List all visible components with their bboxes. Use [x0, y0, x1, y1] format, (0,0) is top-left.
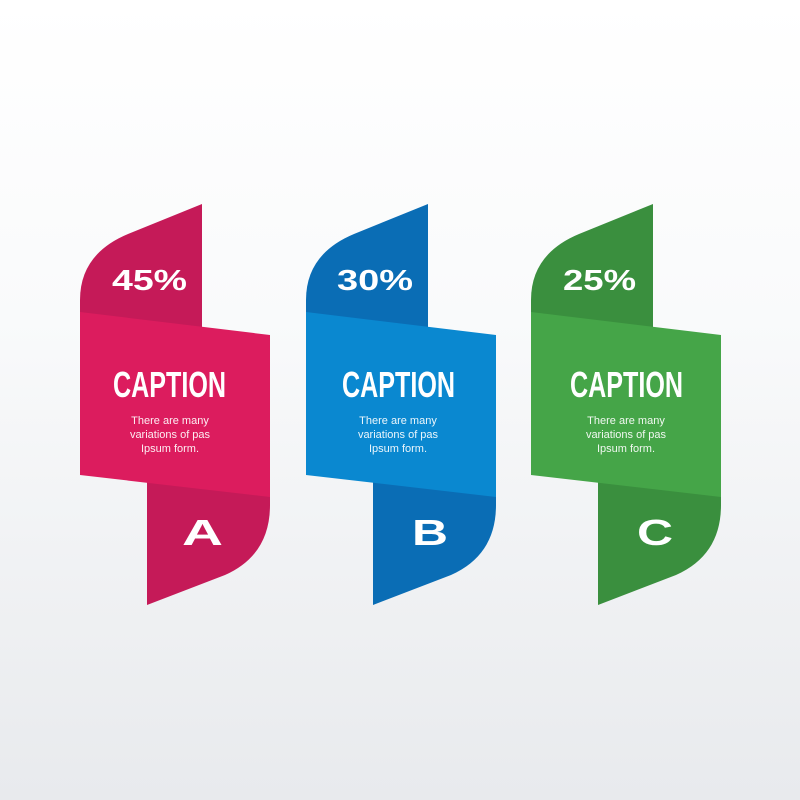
main band A	[80, 312, 270, 497]
letter B: B	[412, 512, 448, 553]
description C: Ipsum form.	[597, 443, 655, 455]
description C: There are many	[587, 415, 665, 427]
description A: variations of pas	[130, 429, 211, 441]
letter C: C	[637, 512, 673, 553]
caption B: CAPTION	[342, 364, 455, 405]
letter A: A	[182, 512, 223, 553]
main band B	[306, 312, 496, 497]
top tab B	[306, 204, 428, 335]
description A	[130, 415, 211, 455]
banner A	[80, 204, 270, 605]
top tab C	[531, 204, 653, 335]
banner C	[531, 204, 721, 605]
description B: Ipsum form.	[369, 443, 427, 455]
main band C	[531, 312, 721, 497]
description C: variations of pas	[586, 429, 667, 441]
percent C: 25%	[563, 265, 636, 297]
banner B	[306, 204, 496, 605]
description B	[358, 415, 439, 455]
caption A: CAPTION	[113, 364, 226, 405]
bottom tab A	[147, 470, 270, 605]
description A: Ipsum form.	[141, 443, 199, 455]
description C	[586, 415, 667, 455]
bottom tab B	[373, 470, 496, 605]
top tab A	[80, 204, 202, 335]
description A: There are many	[131, 415, 209, 427]
description B: variations of pas	[358, 429, 439, 441]
caption C: CAPTION	[570, 364, 683, 405]
bottom tab C	[598, 470, 721, 605]
percent B: 30%	[337, 265, 413, 297]
percent A: 45%	[112, 265, 187, 297]
description B: There are many	[359, 415, 437, 427]
